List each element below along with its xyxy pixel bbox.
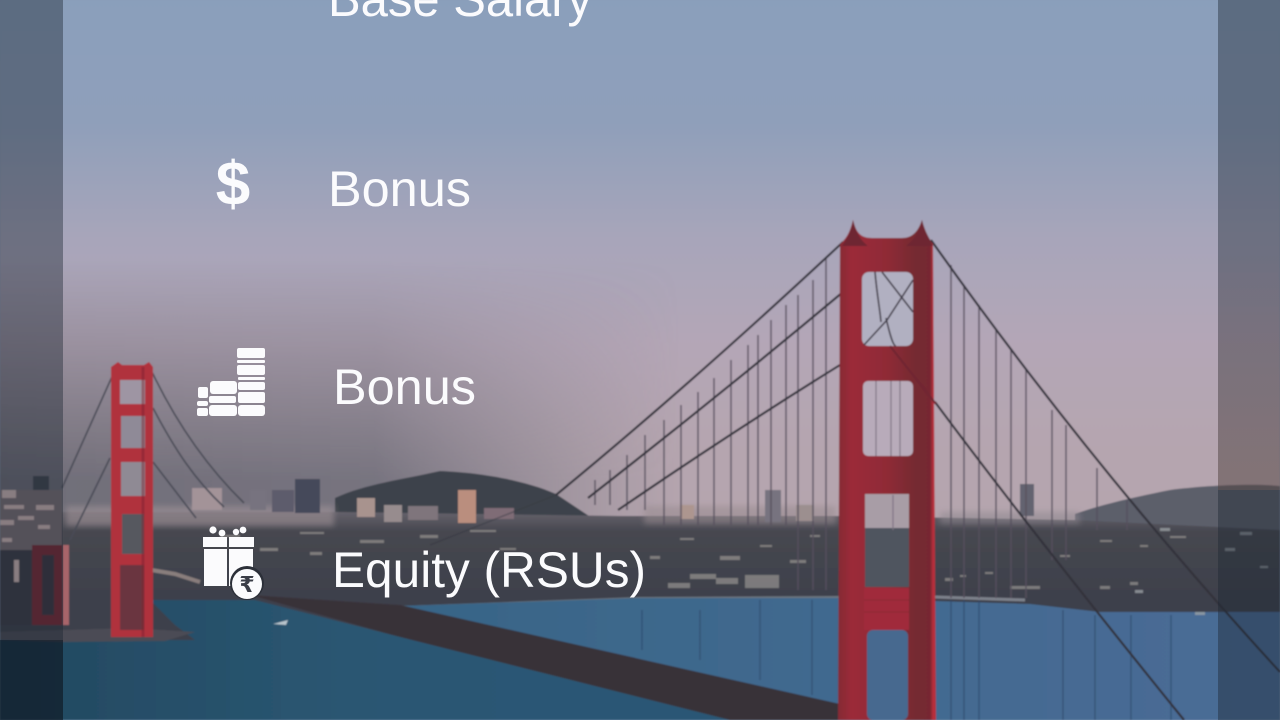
water: right of the deck bbox=[400, 598, 1280, 720]
large tower bbox=[838, 220, 936, 720]
land and city bbox=[0, 512, 1280, 642]
text: Bonus: Bonus bbox=[333, 359, 476, 415]
icon: gift box with coin: ₹ bbox=[239, 573, 255, 598]
side panel: left darkened strip bbox=[0, 0, 63, 720]
shoreline bbox=[400, 597, 840, 607]
far-left second tower bbox=[32, 545, 69, 625]
cables seen through upper window bbox=[864, 272, 913, 346]
sky bbox=[0, 0, 1280, 560]
water: left of the deck bbox=[0, 600, 730, 720]
side panel: right darkened strip bbox=[1218, 0, 1280, 720]
icon: coin stacks bbox=[197, 348, 265, 416]
base fill behind lower scene bbox=[0, 540, 1280, 720]
main cables bbox=[430, 240, 1280, 720]
small boat bbox=[273, 620, 288, 625]
large tower suspender cables bbox=[595, 258, 1127, 598]
list of compensation items bbox=[197, 0, 646, 600]
text: Equity (RSUs): Equity (RSUs) bbox=[332, 542, 646, 598]
pale road near small tower bbox=[122, 565, 200, 582]
icon: gift box with coin bbox=[203, 526, 264, 600]
left foot island bbox=[0, 628, 195, 642]
skyline haze bbox=[66, 506, 1080, 526]
distant hill, right bbox=[1075, 485, 1280, 550]
text: Bonus: Bonus bbox=[328, 161, 471, 217]
right side hill lights bbox=[1135, 528, 1268, 615]
haze on left horizon bbox=[0, 286, 631, 516]
icon: dollar sign: $ bbox=[216, 150, 250, 219]
city lights bbox=[220, 530, 1186, 589]
distant hill, centre bbox=[335, 471, 610, 535]
skyline buildings bbox=[33, 476, 1034, 523]
sky through windows bbox=[862, 272, 913, 346]
small tower with cables bbox=[62, 362, 244, 637]
bridge deck bbox=[250, 595, 840, 720]
left bright city cluster bbox=[0, 490, 62, 625]
